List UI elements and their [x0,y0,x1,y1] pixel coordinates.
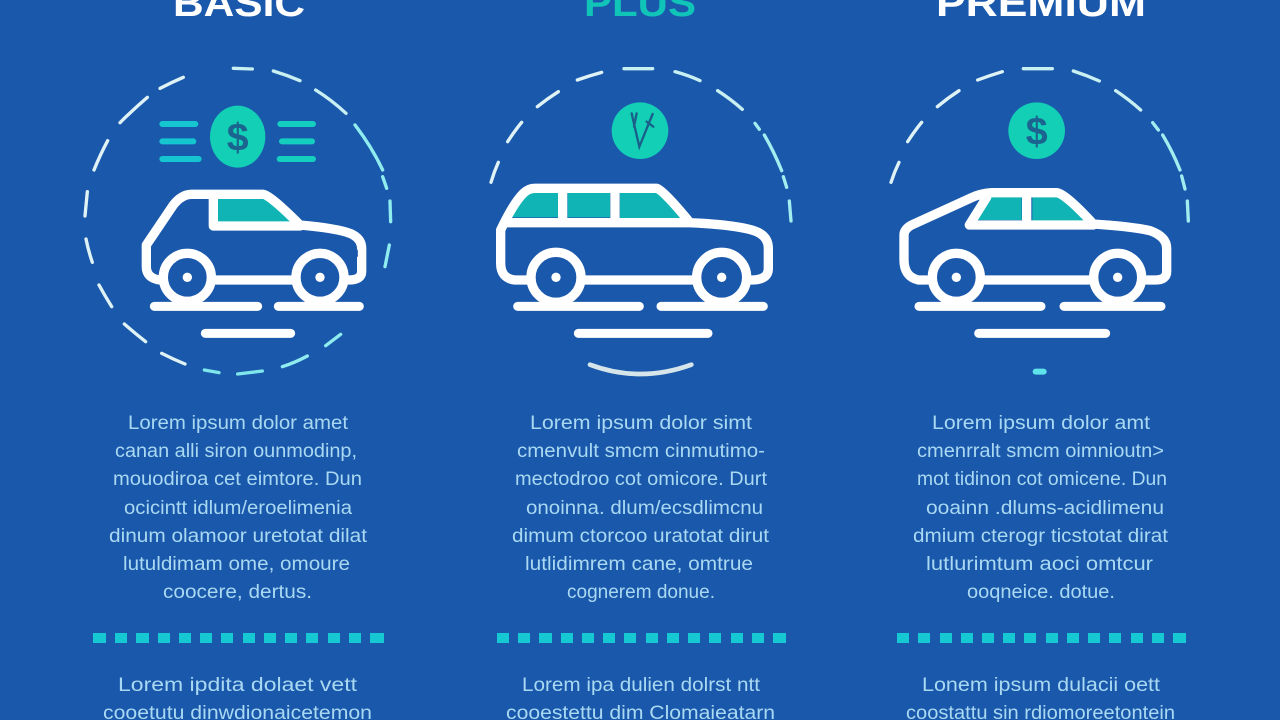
illustration: plus car under dashed arc [491,69,791,374]
icon: car [501,188,768,333]
text block: premium footer: Lonem ipsum dulacii oett [922,675,1161,696]
text block: plus footer: Lorem ipa dulien dolrst ntt [522,675,761,696]
icon: dollar coin with speed lines [162,106,313,168]
icon: dollar coin: $ [1026,110,1048,154]
text block: premium description: ooainn .dlums-acidlimenu [926,498,1164,519]
text block: premium description: lutlurimtum aoci omtcur [926,554,1154,575]
text block: basic footer [103,675,372,720]
text block: basic description [109,413,368,603]
icon: dollar coin [1008,102,1065,159]
dashed circle [85,68,391,374]
decorative arc segment [590,365,691,374]
dotted divider: premium [897,633,1186,643]
text block: plus description: onoinna. dlum/ecsdlimcnu [526,498,763,519]
text block: premium description: Lorem ipsum dolor amt [932,413,1151,434]
text block: premium footer [906,675,1175,720]
text block: plus description: cognerem donue. [567,582,715,603]
text block: plus footer [506,675,775,720]
panel: plus [491,0,791,720]
text block: premium description: ooqneice. dotue. [967,582,1115,603]
icon: car [146,194,362,333]
text block: basic description: canan alli siron ounmodinp, [115,441,357,462]
text block: basic description: Lorem ipsum dolor amet [128,413,349,434]
panel: premium [891,0,1188,720]
text block: basic description: ocicintt idlum/eroelimenia [124,498,352,519]
illustration: premium car under dashed arc [891,69,1188,375]
text block: basic description: lutuldimam ome, omoure [123,554,350,575]
text block: premium description: mot tidinon cot omicene. Dun [917,469,1167,490]
text block: plus description: dimum ctorcoo uratotat dirut [512,526,770,547]
decorative pill [1033,369,1047,375]
icon: car [904,193,1167,333]
dashed arc [891,69,1188,221]
text block: plus description [512,413,770,603]
text block: basic description: mouodiroa cet eimtore. Dun [113,469,362,490]
text block: premium description: cmenrralt smcm oimnioutn> [917,441,1164,462]
text block: plus description: mectodroo cot omicore. Durt [515,469,768,490]
text block: basic description: coocere, dertus. [163,582,312,603]
text block: basic description: dinum olamoor uretotat dilat [109,526,368,547]
icon: dollar coin with speed lines: $ [227,116,249,160]
text block: plus description: Lorem ipsum dolor simt [530,413,753,434]
illustration: basic car in dashed circle [85,68,391,374]
dotted divider: basic [93,633,384,643]
text block: plus description: cmenvult smcm cinmutimo- [517,441,765,462]
text block: basic footer: Lorem ipdita dolaet vett [118,675,358,696]
text block: premium description [913,413,1169,603]
icon: coin with check mark [612,102,668,159]
panel: basic [85,0,391,720]
text block: premium description: dmium cterogr ticstotat dirat [913,526,1169,547]
dashed arc [491,69,791,221]
dotted divider: plus [497,633,786,643]
text block: plus description: lutlidimrem cane, omtrue [525,554,753,575]
